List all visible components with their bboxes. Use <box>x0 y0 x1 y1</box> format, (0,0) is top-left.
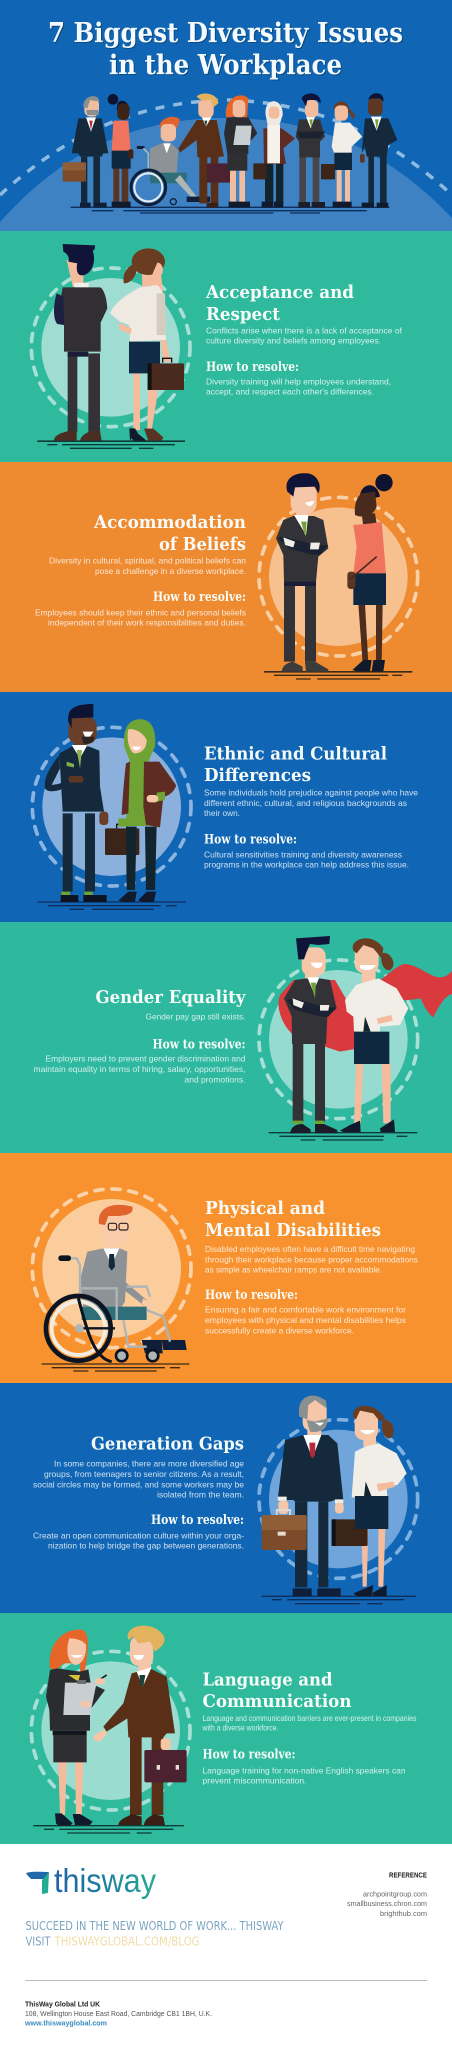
heading <box>205 1198 381 1241</box>
text block: issue <box>204 788 418 818</box>
text block: issue: Language and communication barriers are ever-present in companies <box>202 1713 416 1723</box>
text block: resolution: successfully create a diverse workforce. <box>205 1325 354 1335</box>
text block: issue: Gender pay gap still exists. <box>146 1011 246 1021</box>
panel: accommodation of beliefs <box>0 462 452 692</box>
illustration: man and woman wearing capes <box>259 936 452 1141</box>
text block: issue: Conflicts arise when there is a lack of acceptance of <box>206 326 403 336</box>
text block: resolution: programs in the workplace can help address this issue. <box>204 860 409 870</box>
subheading: How to resolve: <box>152 1037 246 1052</box>
person: woman in white hijab <box>253 101 295 207</box>
heading: Communication <box>202 1691 352 1712</box>
tagline: VISIT <box>26 1933 51 1948</box>
title: 7 Biggest Diversity Issues <box>48 17 403 49</box>
text block: resolution: employees with physical and mental disabilities helps <box>205 1315 406 1325</box>
text block: issue <box>206 326 403 346</box>
heading: Gender Equality <box>96 987 246 1008</box>
heading <box>204 743 387 786</box>
text block: issue: Some individuals hold prejudice against people who have <box>204 788 418 798</box>
text block: resolution <box>206 376 391 396</box>
woman from behind <box>110 248 184 441</box>
subheading: How to resolve: <box>202 1747 296 1762</box>
person: woman in white blouse <box>321 101 362 207</box>
text block: issue: social circles may be formed, and some workers may be <box>33 1479 244 1489</box>
panel: acceptance and respect <box>0 231 452 462</box>
text block: issue: In some companies, there are more diversified age <box>54 1459 244 1469</box>
person: woman in coral top <box>108 94 133 207</box>
panel: physical and mental disabilities <box>0 1153 452 1383</box>
text block: issue: isolated from the team. <box>157 1490 244 1500</box>
text block: resolution: prevent miscommunication. <box>202 1775 306 1785</box>
heading: Mental Disabilities <box>205 1220 381 1241</box>
reference list: REFERENCE <box>389 1872 427 1879</box>
man from behind <box>54 244 107 441</box>
bearded man <box>45 704 108 902</box>
illustration: man and woman talking <box>259 473 418 680</box>
text block: issue: culture diversity and beliefs among employees. <box>206 336 381 346</box>
text block: issue <box>33 1459 244 1500</box>
text block: resolution <box>205 1305 406 1335</box>
wheelchair <box>46 1255 170 1362</box>
text block: issue: their own. <box>204 808 240 818</box>
heading: Physical and <box>205 1198 325 1219</box>
text block: resolution: nization to help bridge the gap between generations. <box>48 1541 244 1551</box>
text block: resolution: Diversity training will help employees understand, <box>206 376 391 386</box>
text block: resolution <box>202 1765 406 1785</box>
text block: issue: Disabled employees often have a difficult time navigating <box>205 1244 415 1254</box>
panel: footer <box>0 1844 452 2048</box>
text block: resolution <box>35 607 246 628</box>
subheading: How to resolve: <box>206 360 299 375</box>
subheading: How to resolve: <box>204 832 297 847</box>
text block: issue: Diversity in cultural, spiritual, and political beliefs can <box>49 556 246 566</box>
company address: 108, Wellington House East Road, Cambridge CB1 1BH, U.K. <box>25 2011 212 2018</box>
subheading: How to resolve: <box>151 1513 244 1528</box>
text block: resolution: independent of their work responsibilities and duties. <box>48 618 246 628</box>
title <box>48 17 403 81</box>
illustration: man and woman in hijab <box>32 704 191 910</box>
panel: generation gaps <box>0 1383 452 1613</box>
heading <box>205 282 354 325</box>
person: man in wheelchair <box>131 117 210 205</box>
text block: issue <box>205 1244 418 1275</box>
text block: resolution <box>204 850 409 870</box>
heading: Acceptance and <box>205 282 354 303</box>
heading: Language and <box>202 1670 333 1691</box>
logo: thisway: thisway <box>54 1862 156 1899</box>
text block: issue: groups, from teenagers to senior citizens. As a result, <box>44 1469 244 1479</box>
title: in the Workplace <box>109 49 342 81</box>
panel: ethnic and cultural differences <box>0 692 452 922</box>
illustration: woman with clipboard and man with briefcase <box>31 1626 190 1834</box>
heading: Respect <box>206 304 281 325</box>
man with crossed arms <box>276 473 328 672</box>
text block: resolution: accept, and respect each other's differences. <box>206 386 374 396</box>
tagline: SUCCEED IN THE NEW WORLD OF WORK... THISWAY <box>26 1918 284 1933</box>
man with crossed arms <box>284 936 337 1133</box>
heading <box>93 512 246 555</box>
woman in coral top <box>347 474 393 672</box>
text block: issue: with a diverse workforce. <box>202 1723 278 1733</box>
illustration: nine diverse employees <box>63 93 397 214</box>
woman <box>46 1630 107 1826</box>
text block: resolution <box>33 1530 244 1551</box>
tagline <box>26 1918 284 1948</box>
reference list: brighthub.com <box>380 1911 427 1918</box>
company address: ThisWay Global Ltd UK <box>25 2002 100 2009</box>
reference list <box>347 1872 427 1918</box>
woman in green hijab <box>105 719 176 902</box>
text block: issue: different ethnic, cultural, and religious backgrounds as <box>204 798 407 808</box>
person: older man <box>63 96 108 207</box>
text block: resolution: Ensuring a fair and comfortable work environment for <box>205 1305 406 1315</box>
text block: issue: through their workplace because proper accommodations <box>205 1254 418 1264</box>
heading: Generation Gaps <box>91 1434 244 1455</box>
illustration: man and woman from behind <box>31 244 190 449</box>
reference list: smallbusiness.chron.com <box>347 1901 427 1908</box>
reference list: archpointgroup.com <box>363 1892 427 1899</box>
subheading: How to resolve: <box>153 590 246 605</box>
company address <box>24 2002 212 2027</box>
panel: language and communication <box>0 1613 452 1844</box>
person: man with crossed arms <box>296 93 325 207</box>
woman with cape <box>340 938 408 1132</box>
text block: issue <box>49 556 246 576</box>
text block: resolution: and promotions. <box>184 1074 246 1084</box>
text block: resolution: Language training for non-native English speakers can <box>202 1765 406 1775</box>
company address: www.thiswayglobal.com <box>24 2020 107 2027</box>
text block: resolution: Create an open communication culture within your orga- <box>33 1530 244 1540</box>
illustration: man in wheelchair <box>32 1189 191 1372</box>
red cape <box>279 964 452 1052</box>
text block: resolution: Cultural sensitivities training and diversity awareness <box>204 850 402 860</box>
text block: issue <box>202 1713 416 1733</box>
text block: resolution: Employers need to prevent gender discrimination and <box>46 1054 246 1064</box>
panel: gender equality <box>0 922 452 1153</box>
heading: Ethnic and Cultural <box>204 743 387 764</box>
text block: resolution <box>34 1054 246 1084</box>
tagline: THISWAYGLOBAL.COM/BLOG <box>54 1933 200 1948</box>
subheading: How to resolve: <box>205 1288 298 1303</box>
illustration: older man and young woman <box>259 1396 418 1604</box>
text block: resolution: maintain equality in terms of hiring, salary, opportunities, <box>34 1064 246 1074</box>
heading: of Beliefs <box>159 534 246 555</box>
heading: Accommodation <box>93 512 246 533</box>
panel: header <box>0 0 452 231</box>
person: man with beard <box>360 93 397 207</box>
person: blond man in brown suit <box>178 93 231 207</box>
person <box>80 1205 187 1353</box>
woman <box>332 1406 407 1596</box>
text block: resolution: Employees should keep their ethnic and personal beliefs <box>35 607 246 617</box>
older man <box>262 1396 344 1596</box>
heading <box>202 1670 352 1712</box>
man <box>93 1626 187 1825</box>
text block: issue: pose a challenge in a diverse workplace. <box>95 566 246 576</box>
person: red-haired woman with clipboard <box>224 95 257 207</box>
heading: Differences <box>204 765 311 786</box>
text block: issue: as simple as wheelchair ramps are not available. <box>205 1265 382 1275</box>
